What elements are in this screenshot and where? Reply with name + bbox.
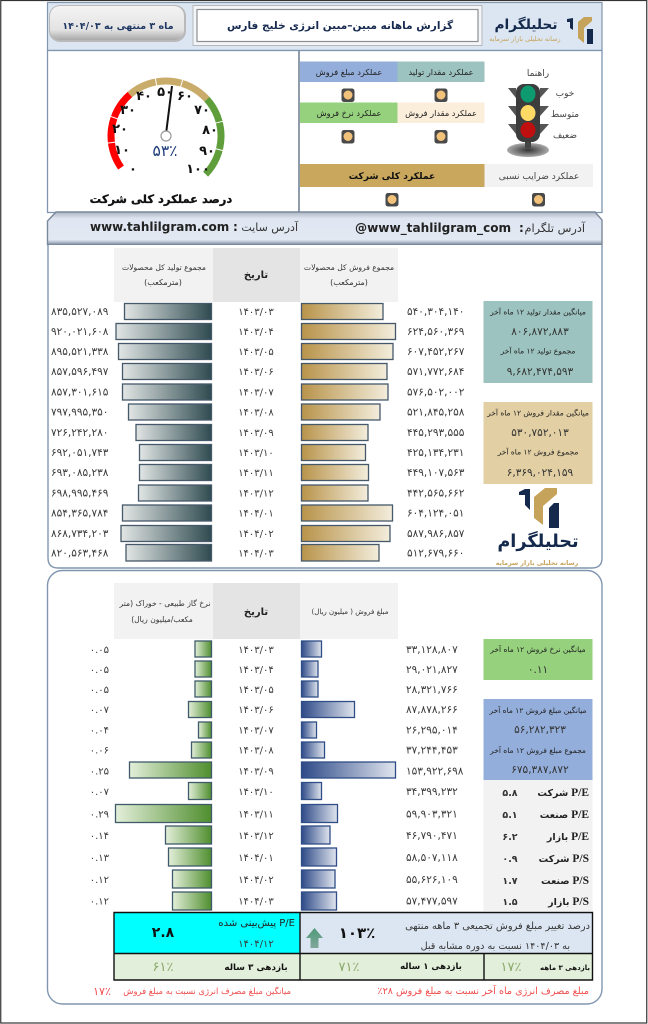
3-month return cell: ۱۷٪ bbox=[501, 960, 521, 975]
telegram address bbox=[355, 221, 586, 236]
gas rate values: ۰.۲۵ bbox=[90, 766, 109, 778]
dates bbox=[238, 645, 274, 908]
performance tile: sales rate bbox=[300, 102, 398, 123]
callout: production summary: ۸۰۶,۸۷۲,۸۸۳ bbox=[511, 326, 569, 338]
callout: sales volume summary bbox=[484, 402, 592, 484]
dates: ۱۴۰۴/۰۳ bbox=[238, 548, 274, 560]
gauge arc tan bbox=[130, 81, 207, 99]
dates: ۱۴۰۴/۰۱ bbox=[238, 508, 274, 520]
telegram address: : bbox=[519, 221, 524, 235]
legend: traffic light bbox=[507, 69, 579, 157]
3-month return cell bbox=[484, 954, 592, 980]
column heading: sales bbox=[300, 248, 398, 302]
valuation ratio table: ۶.۲ bbox=[502, 832, 518, 843]
dates: ۱۴۰۳/۱۲ bbox=[238, 831, 274, 842]
gas rate values: ۰.۰۷ bbox=[90, 705, 110, 716]
production values: ۸۳۵,۵۲۷,۰۸۹ bbox=[51, 306, 109, 318]
valuation ratio table: P/E صنعت bbox=[540, 809, 589, 821]
panel: production and sales volume bbox=[48, 245, 602, 568]
energy cost note: last month: مبلغ مصرف انرژی ماه آخر نسبت به مبلغ فروش ۲۸٪ bbox=[377, 984, 589, 997]
column heading: production: مجموع تولید کل محصولات bbox=[122, 263, 206, 272]
traffic light icon bbox=[507, 84, 549, 157]
column heading: sales amount bbox=[300, 583, 398, 639]
sales amount values: ۵۸,۵۰۷,۱۱۸ bbox=[406, 852, 458, 864]
dates: ۱۴۰۳/۰۵ bbox=[238, 347, 274, 358]
valuation ratio table: P/E بازار bbox=[546, 831, 589, 843]
brand logo large: تحلیلگرام bbox=[497, 530, 579, 552]
callout: sales rate summary: ۰.۱۱ bbox=[528, 664, 548, 676]
callout: production summary: مجموع تولید ۱۲ ماه آخر bbox=[500, 346, 575, 356]
dates: ۱۴۰۳/۰۳ bbox=[238, 645, 274, 656]
telegram address: @www_tahlilgram_com bbox=[355, 221, 511, 236]
gauge arc red bbox=[111, 94, 130, 168]
gas rate values: ۰.۲۹ bbox=[90, 810, 109, 820]
sales volume values: ۵۴۰,۳۰۴,۱۴۰ bbox=[407, 306, 464, 318]
sales amount values: ۳۷,۲۴۴,۴۵۳ bbox=[406, 744, 458, 756]
column heading: sales: مجموع فروش کل محصولات bbox=[304, 263, 394, 272]
gas rate values: ۰.۱۲ bbox=[90, 875, 109, 886]
performance tile: production: عملکرد مقدار تولید bbox=[408, 67, 474, 77]
header band bbox=[48, 2, 602, 50]
gauge bbox=[107, 78, 223, 177]
dates: ۱۴۰۳/۰۶ bbox=[238, 367, 274, 378]
dates: ۱۴۰۳/۰۵ bbox=[238, 685, 274, 696]
gas rate values: ۰.۰۵ bbox=[90, 665, 109, 676]
production values: ۸۵۷,۳۰۱,۶۱۵ bbox=[51, 386, 109, 398]
production values: ۶۹۳,۰۸۵,۲۳۸ bbox=[51, 467, 109, 479]
sales amount values: ۲۹,۰۲۱,۸۲۷ bbox=[406, 664, 458, 676]
gas rate values: ۰.۰۴ bbox=[90, 726, 109, 736]
callout: sales volume summary: مجموع فروش ۱۲ ماه آخر bbox=[497, 446, 578, 456]
gauge scale: ۶۰ bbox=[177, 89, 193, 104]
callout: sales amount summary bbox=[484, 699, 592, 780]
column heading: date: تاریخ bbox=[244, 607, 268, 618]
dates: ۱۴۰۳/۰۸ bbox=[238, 746, 274, 756]
column heading: gas rate bbox=[114, 583, 213, 639]
dates: ۱۴۰۳/۱۲ bbox=[238, 488, 274, 500]
3-year return cell: ۶۱٪ bbox=[153, 960, 173, 975]
valuation ratio table: ۵.۸ bbox=[502, 788, 518, 799]
dates: ۱۴۰۳/۰۸ bbox=[238, 408, 274, 418]
legend: traffic light: خوب bbox=[556, 89, 574, 99]
sales amount values: ۴۶,۷۹۰,۴۷۱ bbox=[406, 830, 458, 842]
sales volume values: ۵۸۷,۹۸۶,۸۵۷ bbox=[407, 528, 465, 540]
sales volume values: ۵۲۱,۸۴۵,۲۵۸ bbox=[407, 406, 465, 418]
sales amount values: ۳۴,۳۹۹,۲۳۲ bbox=[406, 786, 458, 798]
energy cost note: average: ۱۷٪ bbox=[93, 985, 111, 998]
production values bbox=[51, 306, 109, 560]
1-year return cell: بازدهی ۱ ساله bbox=[400, 962, 462, 972]
production values: ۷۹۷,۹۹۵,۳۵۰ bbox=[51, 406, 108, 418]
sales volume values: ۴۴۵,۲۹۳,۵۵۵ bbox=[407, 427, 465, 439]
sales amount values: ۸۷,۸۷۸,۲۶۶ bbox=[406, 704, 458, 716]
callout: sales rate summary bbox=[484, 639, 592, 680]
3-month return cell: بازدهی ۳ ماهه bbox=[540, 964, 590, 972]
valuation ratio table: ۱.۵ bbox=[502, 897, 518, 908]
bar chart: gas rate bbox=[116, 641, 212, 910]
date pill: ماه ۳ منتهی به ۱۴۰۴/۰۳ bbox=[62, 21, 174, 32]
summary table bbox=[114, 912, 592, 980]
bar chart: production bbox=[116, 304, 212, 561]
callout: sales volume summary: میانگین مقدار فروش ۱۲ ماه آخر bbox=[486, 408, 589, 418]
icon: up arrow bbox=[306, 928, 323, 948]
performance tile: sales amount: عملکرد مبلغ فروش bbox=[316, 67, 382, 77]
callout: sales amount summary: مجموع مبلغ فروش ۱۲ ماه آخر bbox=[489, 745, 586, 755]
legend: traffic light: راهنما bbox=[527, 69, 549, 79]
gauge value: ۵۳٪ bbox=[153, 142, 177, 160]
valuation ratio table: P/E شرکت bbox=[537, 787, 589, 799]
sales change cell: درصد تغییر مبلغ فروش تجمیعی ۳ ماهه منتهی bbox=[405, 921, 590, 932]
callout: sales amount summary: میانگین مبلغ فروش ۱۲ ماه آخر bbox=[488, 705, 587, 715]
callout: sales volume summary: ۵۳۰,۷۵۲,۰۱۳ bbox=[511, 427, 569, 439]
gauge scale: ۲۰ bbox=[112, 122, 128, 137]
energy cost note: average bbox=[93, 985, 291, 998]
dates: ۱۴۰۳/۰۳ bbox=[238, 307, 274, 318]
gas rate values: ۰.۱۲ bbox=[90, 896, 109, 908]
dates: ۱۴۰۳/۰۷ bbox=[238, 388, 274, 398]
performance tile: sales volume: عملکرد مقدار فروش bbox=[405, 108, 477, 118]
website address: www.tahlilgram.com bbox=[90, 220, 229, 234]
column heading: gas rate: مکعب/میلیون ریال) bbox=[131, 615, 193, 624]
valuation ratio table: ۰.۹ bbox=[502, 854, 518, 865]
panel: rates and sales amount bbox=[48, 570, 602, 1004]
production values: ۸۲۰,۵۶۳,۴۶۸ bbox=[51, 548, 109, 560]
gas rate values: ۰.۰۷ bbox=[90, 787, 110, 798]
gauge title: درصد عملکرد کلی شرکت bbox=[90, 192, 232, 206]
gauge scale: ۷۰ bbox=[194, 103, 210, 118]
production values: ۹۲۰,۰۲۱,۶۰۸ bbox=[51, 326, 109, 338]
sales amount values: ۲۶,۲۹۵,۰۱۴ bbox=[406, 724, 458, 736]
performance tile: production bbox=[398, 62, 484, 82]
brand logo small: تحلیلگرام bbox=[495, 16, 557, 33]
performance tile: ratios bbox=[484, 164, 593, 187]
dates bbox=[238, 307, 274, 560]
brand logo small: رسانه تحلیلی بازار سرمایه bbox=[489, 35, 561, 43]
production values: ۷۲۶,۲۴۲,۲۸۰ bbox=[51, 427, 108, 439]
column heading: date bbox=[213, 583, 300, 639]
contact bar bbox=[48, 212, 602, 244]
production values: ۶۹۸,۹۹۵,۴۶۹ bbox=[51, 488, 109, 500]
production values: ۸۵۷,۵۹۶,۴۹۷ bbox=[51, 366, 109, 378]
performance tile: ratios: عملکرد ضرایب نسبی bbox=[499, 172, 579, 182]
gas rate values: ۰.۱۳ bbox=[90, 853, 110, 864]
legend: traffic light: ضعیف bbox=[553, 131, 577, 141]
sales amount values: ۳۳,۱۲۸,۸۰۷ bbox=[406, 644, 458, 656]
sales amount values: ۵۹,۹۰۳,۳۲۱ bbox=[406, 808, 458, 820]
dates: ۱۴۰۳/۰۹ bbox=[238, 428, 274, 439]
sales volume values: ۴۴۹,۱۰۷,۵۶۳ bbox=[407, 467, 465, 479]
3-year return cell: بازدهی ۳ ساله bbox=[224, 963, 288, 973]
column heading: sales: (مترمکعب) bbox=[330, 278, 368, 287]
energy cost note: average: میانگین مبلغ مصرف انرژی نسبت به مبلغ فروش bbox=[123, 986, 291, 996]
gauge scale: ۰ bbox=[129, 162, 137, 177]
3-year return cell bbox=[114, 954, 300, 980]
telegram address: آدرس تلگرام bbox=[524, 221, 586, 236]
gauge needle bbox=[161, 86, 172, 141]
gas rate values: ۰.۰۶ bbox=[90, 746, 109, 756]
bar chart: sales amount bbox=[302, 641, 396, 910]
date pill bbox=[49, 5, 186, 42]
performance tile: overall: عملکرد کلی شرکت bbox=[349, 171, 435, 182]
gauge arc green bbox=[206, 99, 221, 174]
dates: ۱۴۰۳/۰۹ bbox=[238, 766, 274, 778]
column heading: date bbox=[213, 248, 300, 302]
dates: ۱۴۰۳/۰۴ bbox=[238, 327, 274, 338]
valuation ratio table: P/S شرکت bbox=[539, 853, 589, 865]
valuation ratio table: P/S بازار bbox=[547, 896, 589, 908]
performance tile: sales amount bbox=[300, 62, 398, 82]
website address: آدرس سایت bbox=[241, 220, 299, 234]
sales volume values: ۶۲۴,۵۶۰,۳۶۹ bbox=[407, 326, 465, 338]
production values: ۸۵۴,۳۶۵,۷۸۴ bbox=[51, 508, 108, 520]
dates: ۱۴۰۳/۰۴ bbox=[238, 665, 274, 676]
forecast P/E cell: ۲.۸ bbox=[152, 925, 175, 941]
sales change cell bbox=[300, 912, 592, 954]
sales volume values: ۶۰۷,۴۵۲,۲۶۷ bbox=[407, 346, 465, 358]
column heading: production bbox=[114, 248, 213, 302]
website address bbox=[90, 220, 299, 234]
production values: ۸۶۸,۷۳۴,۲۰۳ bbox=[51, 528, 109, 540]
brand logo large bbox=[496, 488, 579, 567]
bar chart: sales volume bbox=[302, 304, 396, 561]
sales change cell: ۱۰۳٪ bbox=[339, 924, 375, 942]
report title: گزارش ماهانه مبین–مبین انرژی خلیج فارس bbox=[227, 19, 454, 32]
gauge scale: ۱۰۰ bbox=[186, 162, 210, 177]
sales volume values: ۵۱۲,۶۷۹,۶۶۰ bbox=[407, 548, 464, 560]
1-year return cell bbox=[300, 954, 484, 980]
sales volume values: ۶۰۴,۱۲۴,۰۵۱ bbox=[407, 508, 464, 520]
brand logo small bbox=[489, 16, 593, 44]
sales volume values bbox=[407, 306, 465, 560]
valuation ratio table: ۵.۱ bbox=[502, 810, 518, 821]
callout: sales amount summary: ۵۶,۲۸۲,۳۲۳ bbox=[514, 724, 566, 736]
gauge scale: ۱۰ bbox=[114, 143, 130, 158]
callout: production summary: ۹,۶۸۲,۴۷۴,۵۹۳ bbox=[507, 366, 574, 378]
dates: ۱۴۰۴/۰۲ bbox=[238, 875, 274, 886]
dates: ۱۴۰۳/۱۰ bbox=[238, 448, 274, 459]
gauge scale: ۳۰ bbox=[120, 103, 136, 118]
legend: traffic light: متوسط bbox=[551, 110, 579, 120]
sales volume values: ۵۷۱,۷۷۲,۶۸۴ bbox=[407, 366, 464, 378]
performance tile: overall bbox=[300, 164, 484, 187]
valuation ratio table: P/S صنعت bbox=[541, 875, 589, 887]
sales amount values: ۵۷,۴۷۷,۵۹۷ bbox=[406, 896, 458, 908]
sales amount values: ۵۵,۶۲۶,۱۰۹ bbox=[406, 874, 458, 886]
dates: ۱۴۰۳/۰۷ bbox=[238, 726, 274, 736]
column heading: sales amount: مبلغ فروش ( میلیون ریال) bbox=[312, 608, 389, 616]
report title bbox=[193, 6, 482, 46]
production values: ۸۹۵,۵۲۱,۳۳۸ bbox=[51, 346, 109, 358]
gas rate values: ۰.۱۴ bbox=[90, 831, 109, 842]
performance tile: sales rate: عملکرد نرخ فروش bbox=[317, 108, 381, 118]
sales change cell: به ۱۴۰۴/۰۳ نسبت به دوره مشابه قبل bbox=[421, 941, 570, 952]
valuation ratio table bbox=[484, 780, 592, 911]
callout: sales volume summary: ۶,۳۶۹,۰۲۴,۱۵۹ bbox=[507, 467, 574, 479]
column heading: gas rate: نرخ گاز طبیعی - خوراک (متر bbox=[119, 599, 210, 608]
gauge scale bbox=[112, 85, 218, 177]
forecast P/E cell bbox=[114, 912, 300, 954]
performance tile: sales volume bbox=[398, 102, 484, 123]
gas rate values bbox=[90, 645, 110, 908]
dates: ۱۴۰۳/۰۶ bbox=[238, 705, 274, 716]
gas rate values: ۰.۰۵ bbox=[90, 645, 109, 656]
sales volume values: ۴۲۵,۱۳۴,۲۳۱ bbox=[407, 447, 464, 459]
gauge scale: ۵۰ bbox=[157, 85, 173, 100]
forecast P/E cell: ۱۴۰۴/۱۲ bbox=[238, 939, 274, 950]
dates: ۱۴۰۴/۰۳ bbox=[238, 896, 274, 908]
production values: ۶۹۲,۰۵۱,۷۴۳ bbox=[51, 447, 109, 459]
column heading: date: تاریخ bbox=[244, 270, 268, 281]
callout: sales rate summary: میانگین نرخ فروش ۱۲ ماه آخر bbox=[489, 644, 586, 654]
gauge scale: ۸۰ bbox=[202, 123, 218, 138]
callout: production summary bbox=[484, 301, 592, 383]
gauge scale: ۴۰ bbox=[136, 89, 152, 104]
dates: ۱۴۰۳/۱۱ bbox=[238, 810, 274, 820]
callout: sales amount summary: ۶۷۵,۳۸۷,۸۷۲ bbox=[511, 764, 569, 776]
dates: ۱۴۰۳/۱۰ bbox=[238, 787, 274, 798]
callout: production summary: میانگین مقدار تولید ۱۲ ماه آخر bbox=[489, 306, 586, 316]
status lights bbox=[342, 88, 545, 206]
dates: ۱۴۰۴/۰۲ bbox=[238, 529, 274, 540]
sales volume values: ۵۷۶,۵۰۲,۰۰۲ bbox=[407, 386, 465, 398]
column heading: production: (مترمکعب) bbox=[144, 278, 182, 287]
forecast P/E cell: P/E پیش‌بینی شده bbox=[218, 918, 295, 929]
table rules bbox=[114, 912, 592, 980]
gauge scale: ۹۰ bbox=[199, 144, 215, 159]
sales amount values bbox=[406, 644, 464, 908]
valuation ratio table: ۱.۷ bbox=[502, 876, 518, 887]
dates: ۱۴۰۴/۰۱ bbox=[238, 853, 274, 864]
top panel frame bbox=[48, 50, 602, 212]
dates: ۱۴۰۳/۱۱ bbox=[238, 468, 274, 479]
website address: : bbox=[233, 220, 238, 234]
sales amount values: ۲۸,۳۲۱,۷۶۶ bbox=[406, 684, 458, 696]
sales amount values: ۱۵۳,۹۲۲,۶۹۸ bbox=[406, 766, 464, 778]
gas rate values: ۰.۰۵ bbox=[90, 685, 109, 696]
sales volume values: ۴۴۲,۵۶۵,۶۶۲ bbox=[407, 488, 465, 500]
brand logo large: رسانه تحلیلی بازار سرمایه bbox=[496, 560, 579, 567]
1-year return cell: ۷۱٪ bbox=[339, 960, 359, 975]
